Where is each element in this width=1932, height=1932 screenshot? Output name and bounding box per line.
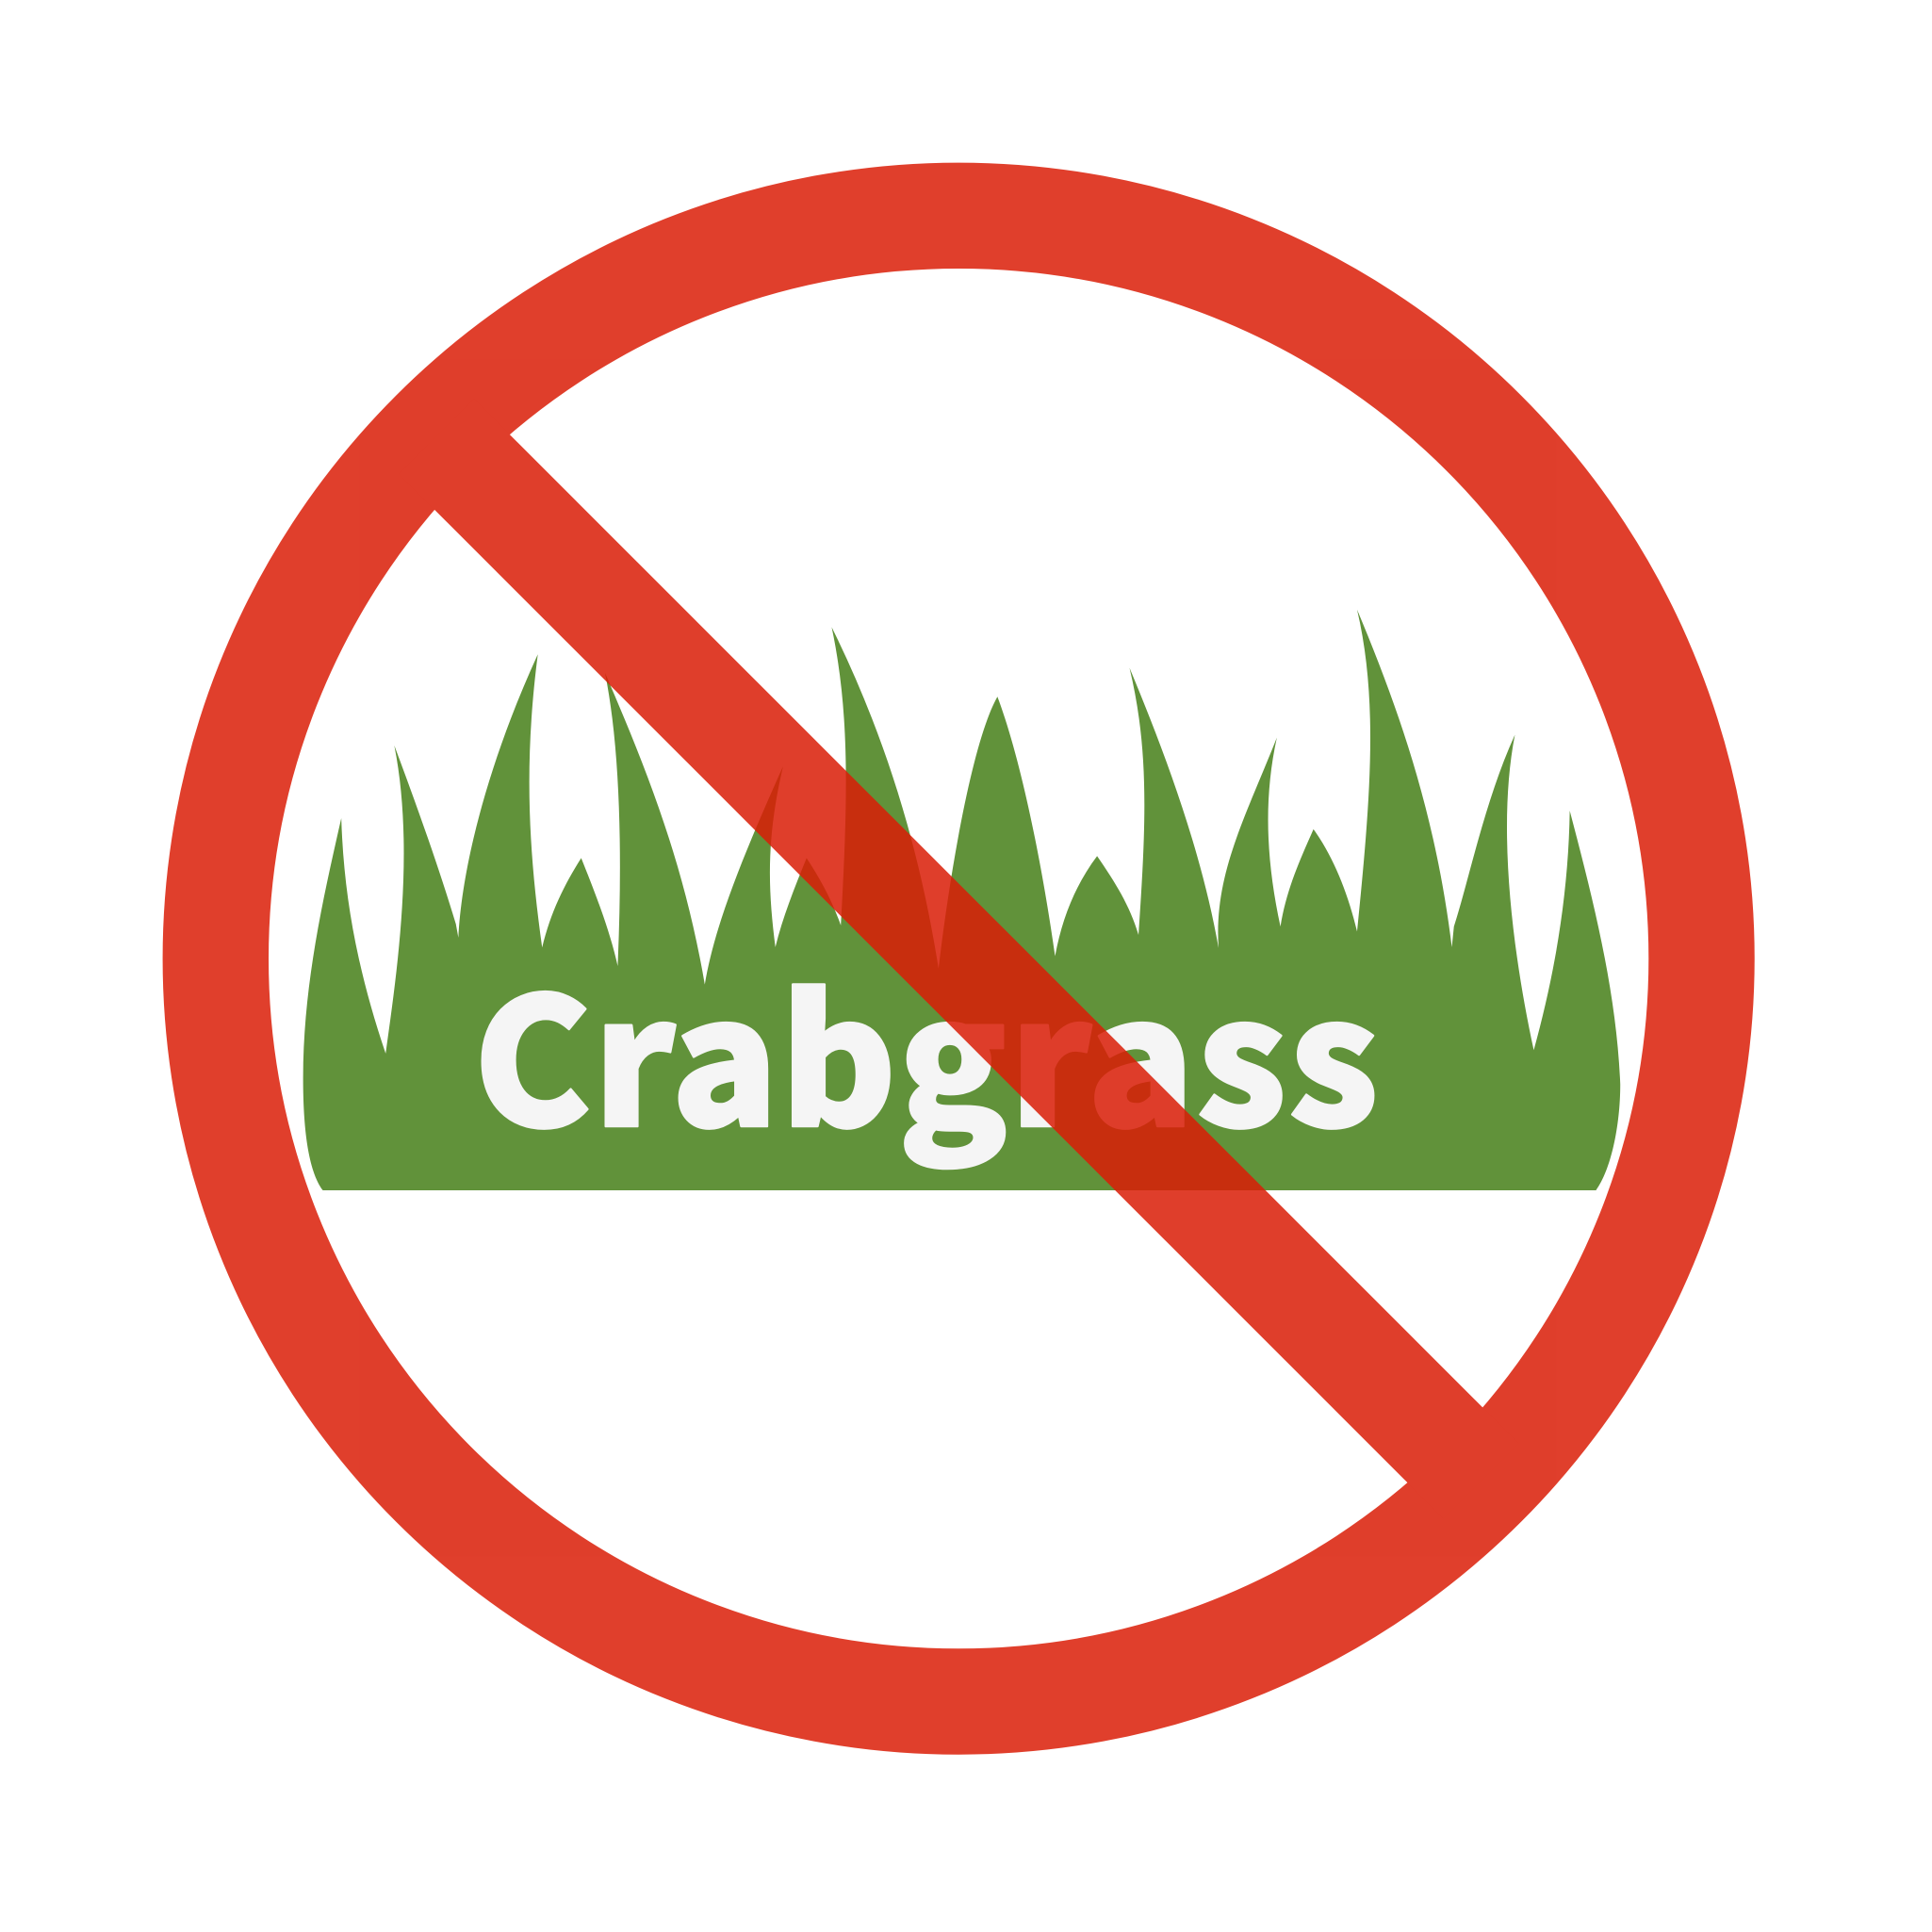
icon: grass clump (303, 610, 1620, 1190)
prohibition ring (216, 216, 1702, 1702)
prohibition slash (436, 436, 1481, 1481)
icon: prohibition sign (216, 216, 1702, 1702)
title: Crabgrass: Crabgrass (473, 922, 1379, 1178)
